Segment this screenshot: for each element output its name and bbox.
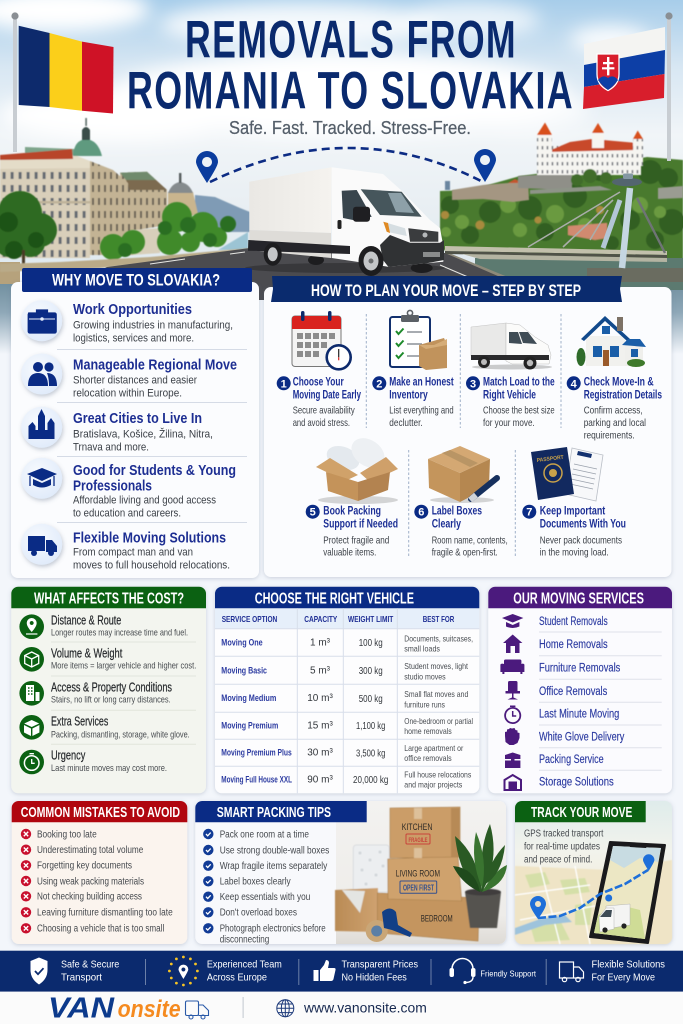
step 2: [372, 310, 454, 429]
table row: moving full house xxl: [221, 769, 471, 789]
item: work opportunities: logistics, services and more.: [73, 332, 194, 344]
flag: Slovakia: [583, 12, 673, 161]
track text: and peace of mind.: [524, 854, 592, 865]
tips list: Photograph electronics before: [220, 924, 326, 935]
factor: access: [19, 681, 172, 706]
service: student removals: Student Removals: [539, 616, 608, 628]
table column heads: [222, 614, 454, 624]
item: flexible moving solutions: [21, 524, 230, 572]
icon: open box with bubble wrap: [316, 432, 398, 504]
logo: VANonsite: onsite: [118, 996, 181, 1023]
table row: moving medium: Moving Medium: [221, 693, 276, 703]
panel: track your move: [515, 801, 672, 944]
mistake list: Leaving furniture dismantling too late: [37, 908, 173, 919]
item: transparent prices: No Hidden Fees: [342, 972, 407, 984]
step 1: Choose Your: [293, 377, 344, 389]
table row: moving basic: Moving Basic: [221, 665, 267, 675]
step 4: [567, 316, 662, 441]
step 4: requirements.: [584, 429, 635, 441]
heading: track: [515, 801, 646, 822]
heading: mistakes: COMMON MISTAKES TO AVOID: [21, 804, 180, 821]
tips list: Label boxes clearly: [220, 877, 291, 888]
item: flexible solutions: For Every Move: [592, 972, 655, 984]
factor: urgency: Last minute moves may cost more.: [51, 763, 167, 774]
heading: step by step: HOW TO PLAN YOUR MOVE – STEP BY STEP: [311, 282, 581, 300]
hero: sky and clouds: [0, 0, 683, 270]
icon: passport and document: PASSPORT: [537, 455, 565, 464]
mistake list: Using weak packing materials: [37, 876, 144, 887]
illustration: water, road and SNP bridge: [40, 174, 683, 300]
panel: choose the right vehicle table: [215, 587, 479, 793]
panel: smart packing tips: [195, 801, 507, 945]
mistake list: Underestimating total volume: [37, 845, 144, 856]
heading: track: TRACK YOUR MOVE: [531, 804, 632, 821]
factor: access: Access & Property Conditions: [51, 681, 172, 695]
tips list: Wrap fragile items separately: [220, 861, 327, 872]
heading: step by step: [271, 276, 622, 302]
step 4: parking and local: [584, 417, 646, 429]
factor: urgency: Urgency: [51, 749, 86, 763]
item: experienced team: Across Europe: [207, 972, 267, 984]
service: furniture removals: Furniture Removals: [539, 663, 620, 675]
table row: moving full house xxl: 90 m³: [307, 774, 333, 785]
logo: VANonsite: [48, 993, 208, 1024]
step 3: for your move.: [483, 417, 535, 429]
box label: kitchen: [402, 822, 432, 844]
icon: tape dispenser: [366, 908, 412, 942]
factor: volume: Volume & Weight: [51, 646, 123, 660]
footer band: [0, 992, 683, 1024]
tips list: Pack one room at a time: [220, 829, 309, 840]
flag: Romania: [11, 12, 113, 152]
step 6: fragile & open-first.: [432, 546, 498, 558]
step 3: Right Vehicle: [483, 390, 536, 402]
step 3: Choose the best size: [483, 405, 555, 417]
item: friendly support: Friendly Support: [480, 969, 537, 978]
icon: van on phone: [599, 904, 630, 933]
service: home removals: [503, 634, 608, 653]
table row: moving full house xxl: and major projects: [404, 779, 462, 789]
item: flexible solutions: [560, 958, 665, 984]
heading: why move: WHY MOVE TO SLOVAKIA?: [52, 271, 220, 290]
heading: tips: [195, 801, 367, 822]
item: experienced team: [168, 956, 282, 986]
step 1: and avoid stress.: [293, 417, 350, 429]
photo: stacked moving boxes: [335, 801, 507, 944]
item: manageable regional move: relocation within Europe.: [73, 387, 182, 399]
item: flexible solutions: Flexible Solutions: [592, 958, 665, 970]
step 4: Confirm access,: [584, 405, 643, 417]
mistake list: Not checking building access: [37, 892, 142, 903]
panel: common mistakes to avoid: [12, 801, 187, 944]
track text: GPS tracked transport: [524, 829, 603, 840]
icon: van: [471, 323, 552, 370]
step 6: [414, 446, 508, 558]
box label: kitchen: KITCHEN: [402, 822, 432, 833]
panel: what affects the cost: [11, 587, 206, 793]
heading: cost: [11, 587, 206, 608]
step 5: valuable items.: [323, 546, 376, 558]
service: packing service: [505, 752, 604, 768]
tips list: Don't overload boxes: [220, 908, 297, 919]
service: packing service: Packing Service: [539, 754, 604, 766]
item: manageable regional move: Shorter distances and easier: [73, 374, 197, 386]
item: work opportunities: Growing industries in manufacturing,: [73, 319, 233, 331]
table row: moving premium: 1,100 kg: [356, 721, 385, 732]
table row: moving medium: [221, 689, 469, 709]
service: student removals: [502, 614, 608, 628]
factor: distance: [19, 613, 188, 639]
service: white glove delivery: White Glove Delivery: [539, 731, 624, 743]
factor: volume: More items = larger vehicle and higher cost.: [51, 660, 196, 671]
table row: moving premium: One-bedroom or partial: [404, 716, 473, 726]
heading: why move: [22, 268, 252, 292]
illustration: fortress and Bratislava castle: [445, 122, 683, 202]
illustration: white removal van: [245, 167, 445, 276]
tips list: Use strong double-wall boxes: [220, 845, 329, 856]
factor: distance: Distance & Route: [51, 613, 121, 627]
table row: moving one: [221, 633, 473, 653]
table row: moving full house xxl: 20,000 kg: [353, 775, 388, 786]
table column heads: WEIGHT LIMIT: [348, 614, 394, 624]
item: friendly support: [450, 958, 537, 984]
icon: small map pins: [605, 854, 654, 902]
step 7: Documents With You: [540, 518, 626, 530]
table column heads: BEST FOR: [423, 614, 454, 624]
icon: left pin: [196, 151, 218, 183]
heading: mistakes: [12, 801, 187, 822]
heading: vehicle: CHOOSE THE RIGHT VEHICLE: [255, 590, 414, 607]
route dashed line: [538, 870, 648, 918]
box label: living room: LIVING ROOM: [396, 869, 440, 880]
table row: moving one: Moving One: [221, 637, 263, 647]
item: flexible moving solutions: Flexible Moving Solutions: [73, 531, 226, 547]
hero: left margin and right margin water: [0, 262, 683, 354]
step 5: Book Packing: [323, 505, 381, 517]
map illustration: [515, 860, 672, 944]
item: safe and secure: [30, 958, 119, 984]
table row: moving basic: studio moves: [404, 671, 446, 681]
panel: why move to Slovakia: [11, 268, 259, 578]
factor: distance: Longer routes may increase time and fuel.: [51, 627, 188, 638]
item: students and young professionals: Good for Students & Young: [73, 463, 236, 479]
table row: moving medium: 500 kg: [359, 694, 383, 705]
item: work opportunities: [21, 300, 233, 344]
table row: moving premium plus: 3,500 kg: [356, 748, 385, 760]
trust bar: [0, 951, 683, 992]
box label: bedroom: BEDROOM: [421, 914, 453, 925]
step 2: Make an Honest: [389, 377, 454, 389]
item: flexible moving solutions: From compact man and van: [73, 547, 193, 559]
footer divider: [243, 997, 244, 1018]
step 7: 7: [526, 507, 532, 519]
service: storage solutions: Storage Solutions: [539, 777, 614, 789]
illustration: Bucharest palace and city on the left: [0, 118, 250, 258]
step 7: [522, 447, 626, 558]
item: safe and secure: Transport: [61, 972, 102, 984]
table row: moving premium: [221, 716, 473, 736]
step 6: Label Boxes: [432, 505, 482, 517]
mistake list: Booking too late: [37, 829, 97, 840]
table row: moving medium: furniture runs: [404, 699, 445, 709]
service: home removals: Home Removals: [539, 639, 608, 651]
table row: moving basic: [221, 661, 469, 681]
step 5: [306, 432, 398, 558]
item: experienced team: Experienced Team: [207, 958, 282, 970]
item: great cities: Bratislava, Košice, Žilina, Nitra,: [73, 427, 213, 440]
panel: how to plan your move: [264, 276, 672, 577]
step 4: Check Move-In &: [584, 377, 654, 389]
heading: vehicle: [215, 587, 479, 608]
tips list: Keep essentials with you: [220, 892, 310, 903]
logo: VANonsite: VAN: [48, 993, 115, 1024]
item: great cities: [21, 407, 213, 453]
step 7: in the moving load.: [540, 546, 609, 558]
table row: moving premium plus: office removals: [404, 753, 452, 763]
step 2: List everything and: [389, 405, 454, 417]
service: furniture removals: [500, 660, 620, 675]
table row: moving medium: 10 m³: [307, 693, 333, 704]
item: manageable regional move: Manageable Regional Move: [73, 357, 237, 373]
title: REMOVALS FROM: [185, 10, 517, 70]
table column heads: CAPACITY: [304, 614, 338, 624]
service: office removals: [506, 681, 607, 700]
tips list: [203, 829, 329, 945]
table row: moving basic: 5 m³: [310, 665, 331, 676]
box label: living room: OPEN FIRST: [403, 884, 434, 892]
step 5: Protect fragile and: [323, 534, 389, 546]
factor: access: Stairs, no lift or long carry distances.: [51, 695, 171, 706]
step 7: Keep Important: [540, 505, 605, 517]
mistake list: Forgetting key documents: [37, 861, 132, 872]
icon: house: [576, 316, 646, 367]
step 3: [466, 323, 555, 429]
heading: cost: WHAT AFFECTS THE COST?: [34, 590, 184, 607]
tips list: disconnecting: [220, 934, 269, 945]
table row: moving premium plus: Moving Premium Plus: [221, 748, 292, 758]
icon: plant: [453, 824, 507, 892]
table row: moving premium: Moving Premium: [221, 720, 278, 730]
table header band: [215, 608, 479, 629]
step 4: 4: [571, 378, 578, 390]
table row: moving full house xxl: Moving Full House XXL: [221, 774, 292, 784]
step 7: Never pack documents: [540, 534, 622, 546]
step 6: 6: [418, 507, 424, 519]
table row: moving premium plus: Large apartment or: [404, 743, 463, 753]
icon: big map pin: [530, 896, 546, 919]
heading: tips: SMART PACKING TIPS: [217, 804, 331, 821]
service: storage solutions: [504, 775, 614, 790]
item: students and young professionals: Professionals: [73, 479, 152, 495]
service: white glove delivery: [505, 728, 624, 745]
table column heads: SERVICE OPTION: [222, 614, 277, 624]
track text: for real-time updates: [524, 842, 600, 853]
box label: kitchen: FRAGILE: [408, 837, 428, 844]
factor: extra services: Packing, dismantling, storage, white glove.: [51, 729, 190, 740]
icon: clipboard and box: [390, 310, 447, 370]
item: great cities: Trnava and more.: [73, 441, 149, 453]
item: manageable regional move: [21, 354, 237, 399]
icon: right pin: [474, 149, 496, 182]
route arc with pins: [196, 148, 496, 183]
item: transparent prices: Transparent Prices: [342, 958, 418, 970]
table row: moving basic: 300 kg: [359, 666, 383, 677]
step 1: Secure availability: [293, 405, 355, 417]
table row: moving premium: home removals: [404, 726, 452, 736]
service: last minute moving: [505, 706, 619, 723]
step 6: Room name, contents,: [432, 534, 508, 546]
step 5: 5: [310, 507, 316, 519]
step 2: declutter.: [389, 417, 423, 429]
factor: urgency: [19, 749, 167, 774]
table row: moving full house xxl: Full house relocations: [404, 769, 471, 779]
heading: services: [488, 587, 672, 608]
table row: moving one: small loads: [404, 643, 440, 653]
mistake list: [21, 829, 173, 935]
table row: moving medium: Small flat moves and: [404, 689, 469, 699]
website link: www.vanonsite.com: [303, 1000, 427, 1015]
icon: calendar and clock: [292, 311, 351, 369]
track text: [524, 829, 603, 865]
table row: moving premium plus: [221, 743, 463, 763]
illustration: Bratislava hill forest: [440, 157, 683, 262]
step 3: 3: [470, 378, 476, 390]
table row: moving one: Documents, suitcases,: [404, 633, 473, 643]
subtitle: Safe. Fast. Tracked. Stress-Free.: [229, 118, 471, 138]
item: work opportunities: Work Opportunities: [73, 302, 192, 318]
step 1: 1: [281, 378, 287, 390]
table row: moving premium plus: 30 m³: [307, 748, 333, 759]
item: students and young professionals: to education and careers.: [73, 507, 181, 519]
table row: moving one: 1 m³: [310, 637, 331, 648]
item: transparent prices: [314, 958, 418, 984]
item: safe and secure: Safe & Secure: [61, 958, 119, 970]
step 1: [277, 311, 361, 429]
table row: moving basic: Student moves, light: [404, 661, 469, 671]
factor: extra services: Extra Services: [51, 715, 108, 729]
box label: living room: [396, 869, 440, 893]
step 6: Clearly: [432, 518, 461, 530]
table row: moving one: 100 kg: [359, 638, 383, 649]
panel: our moving services: [488, 587, 672, 793]
step 2: Inventory: [389, 390, 428, 402]
icon: phone with map: [590, 842, 665, 943]
step 2: 2: [376, 378, 382, 390]
item: flexible moving solutions: moves to full household relocations.: [73, 560, 230, 572]
item: students and young professionals: [21, 458, 236, 519]
service: office removals: Office Removals: [539, 686, 607, 698]
illustration: left trees: [0, 191, 250, 272]
step 3: Match Load to the: [483, 377, 555, 389]
factor: volume: [19, 646, 196, 672]
step 5: Support if Needed: [323, 518, 398, 530]
icon: sealed box and marker: [428, 446, 497, 503]
mistake list: Choosing a vehicle that is too small: [37, 924, 164, 935]
table row: moving premium: 15 m³: [307, 720, 333, 731]
title: [127, 10, 574, 120]
item: great cities: Great Cities to Live In: [73, 411, 202, 427]
step 1: Moving Date Early: [293, 390, 361, 402]
service: last minute moving: Last Minute Moving: [539, 709, 619, 721]
factor: extra services: [19, 715, 190, 740]
item: students and young professionals: Affordable living and good access: [73, 494, 216, 506]
